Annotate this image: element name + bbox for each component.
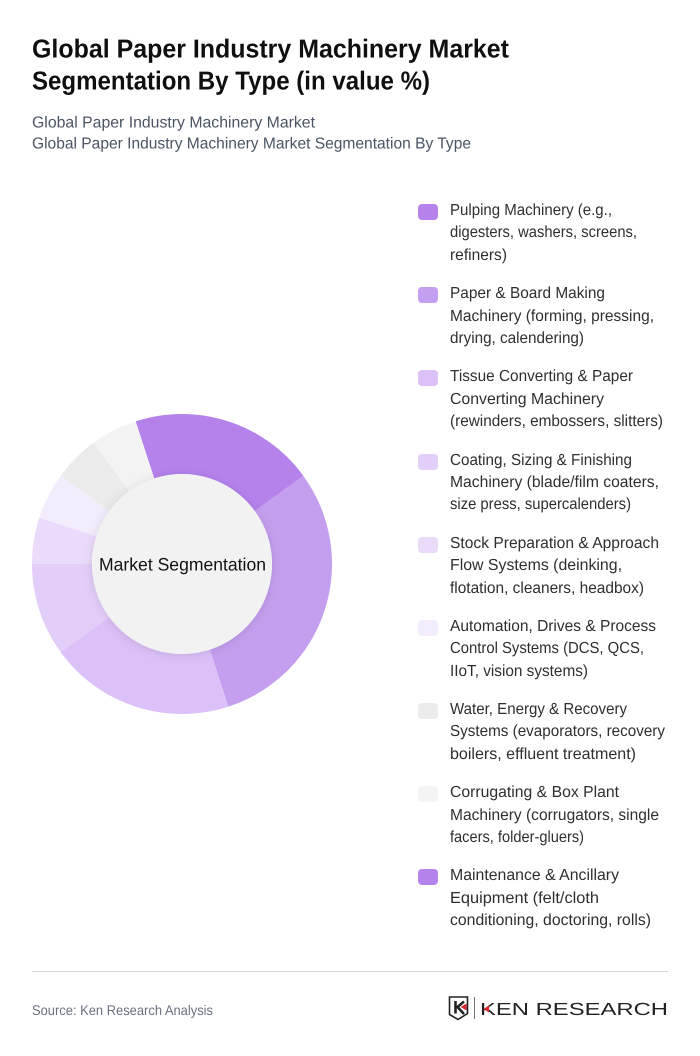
legend item: maintenance: [418, 867, 651, 929]
legend item: stock preparation: Flow Systems (deinking,: [450, 557, 622, 574]
legend item: paper and board: Paper & Board Making: [450, 285, 605, 302]
legend item: coating: [418, 452, 659, 513]
title: Segmentation By Type (in value %): [32, 66, 430, 96]
legend item: automation: Automation, Drives & Process: [450, 618, 656, 635]
legend item: water and energy: Water, Energy & Recovery: [450, 701, 627, 718]
legend item: coating: Coating, Sizing & Finishing: [450, 452, 632, 469]
title: [32, 34, 509, 96]
legend item: paper and board: Machinery (forming, pressing,: [450, 308, 654, 325]
legend item: paper and board: [418, 285, 654, 347]
donut centre: [92, 474, 272, 654]
legend item: automation: [418, 618, 656, 680]
legend item: corrugating: [418, 784, 659, 846]
legend item: corrugating: Corrugating & Box Plant: [450, 784, 620, 801]
legend item: pulping: refiners): [450, 247, 507, 264]
legend item: stock preparation: flotation, cleaners, headbox): [450, 580, 644, 597]
legend item: paper and board: drying, calendering): [450, 330, 584, 347]
legend item: corrugating: Machinery (corrugators, single: [450, 807, 659, 824]
subtitle: [32, 114, 471, 152]
legend item: coating: Machinery (blade/film coaters,: [450, 474, 659, 491]
legend item: water and energy: Systems (evaporators, recovery: [450, 723, 665, 740]
source note: Source: Ken Research Analysis: [32, 1002, 213, 1018]
legend item: tissue converting: Tissue Converting & Paper: [450, 368, 634, 385]
legend item: tissue converting: Converting Machinery: [450, 391, 604, 408]
donut centre: Market Segmentation: [99, 554, 266, 574]
title: Global Paper Industry Machinery Market: [32, 34, 509, 64]
legend item: pulping: digesters, washers, screens,: [450, 224, 637, 241]
legend item: water and energy: boilers, effluent treatment): [450, 746, 636, 763]
legend item: pulping: Pulping Machinery (e.g.,: [450, 202, 612, 219]
legend item: tissue converting: (rewinders, embossers, slitters): [450, 413, 663, 430]
donut chart: [32, 414, 332, 714]
legend item: maintenance: Maintenance & Ancillary: [450, 867, 619, 884]
legend item: automation: Control Systems (DCS, QCS,: [450, 640, 644, 657]
legend item: pulping: [418, 202, 637, 264]
legend item: maintenance: Equipment (felt/cloth: [450, 890, 599, 907]
legend item: maintenance: conditioning, doctoring, rolls): [450, 912, 651, 929]
logo: Ken Research: [450, 997, 668, 1020]
legend item: coating: size press, supercalenders): [450, 496, 631, 513]
legend item: stock preparation: [418, 535, 659, 597]
legend item: corrugating: facers, folder-gluers): [450, 829, 584, 846]
legend item: tissue converting: [418, 368, 663, 430]
icon: shield: [450, 997, 468, 1020]
logo: Ken Research: KEN RESEARCH: [480, 999, 668, 1019]
legend item: automation: IIoT, vision systems): [450, 663, 588, 680]
legend: [418, 202, 665, 929]
subtitle: Global Paper Industry Machinery Market: [32, 114, 316, 132]
legend item: water and energy: [418, 701, 665, 763]
subtitle: Global Paper Industry Machinery Market Segmentation By Type: [32, 136, 471, 152]
legend item: stock preparation: Stock Preparation & Approach: [450, 535, 659, 552]
